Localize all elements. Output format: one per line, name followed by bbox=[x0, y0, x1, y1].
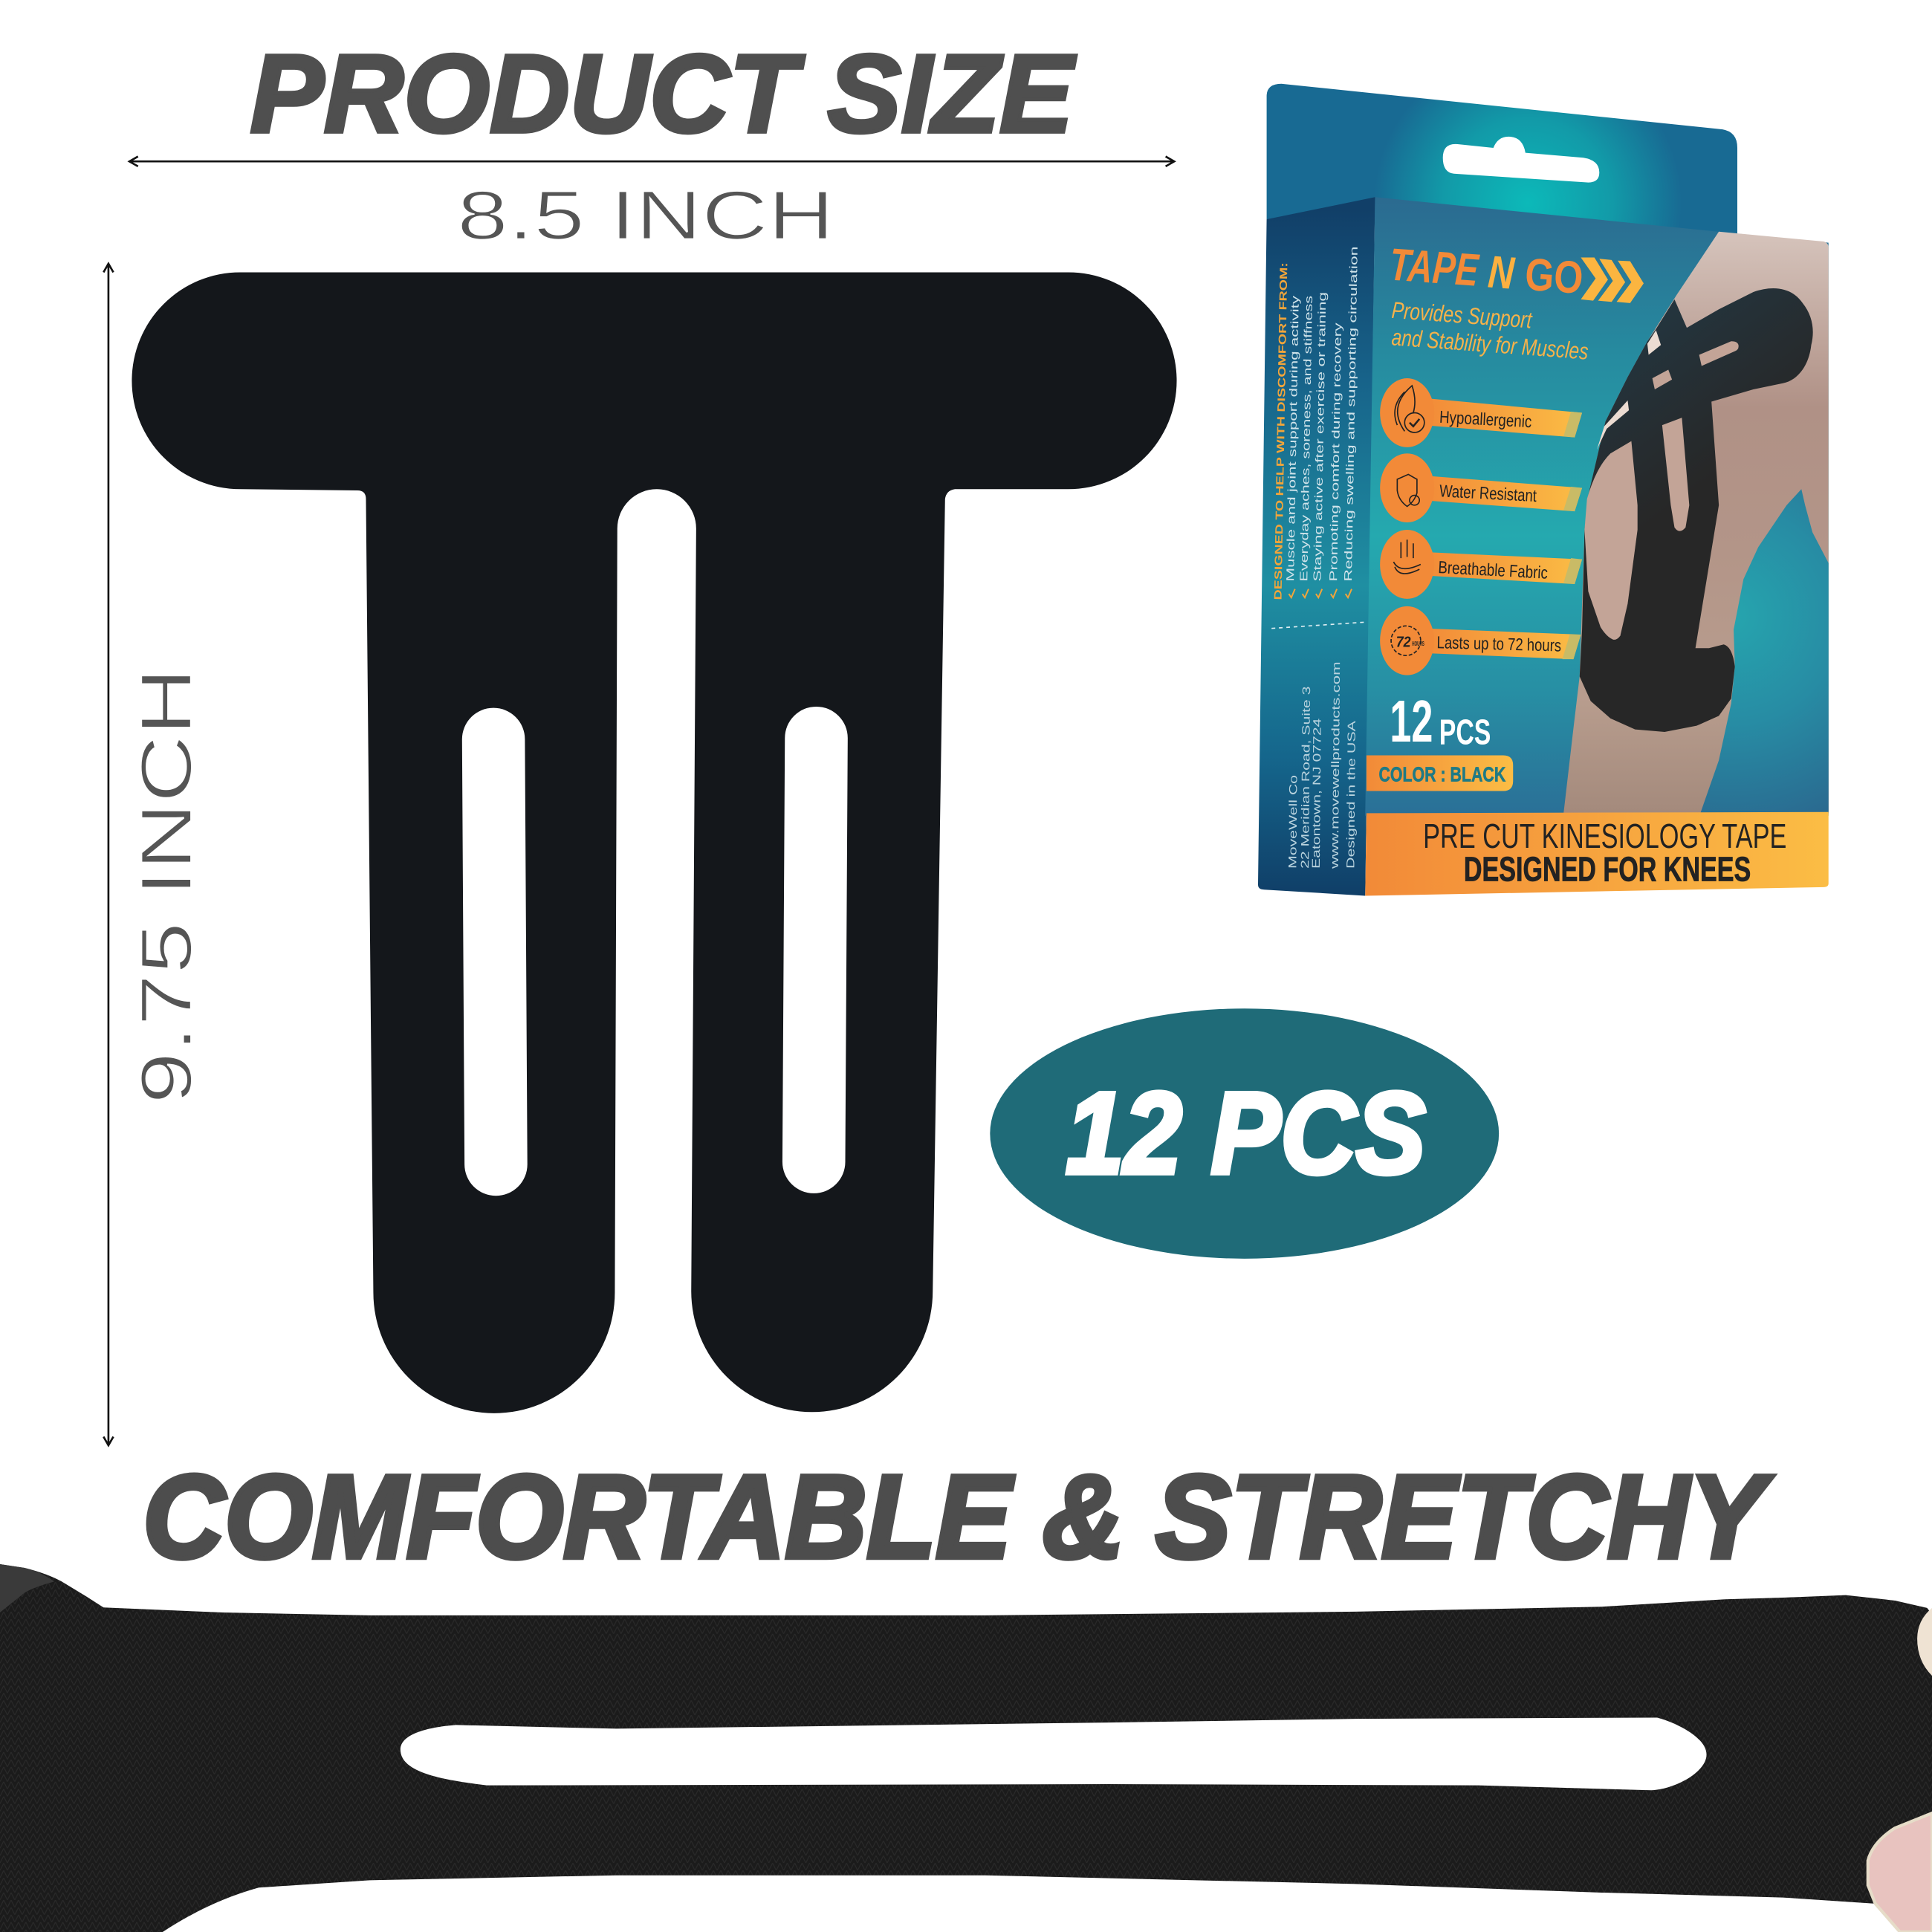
photo: stretched tape bbox=[0, 1564, 1932, 1932]
colour pill: COLOR : BLACK bbox=[1378, 762, 1506, 785]
badge: 12 pcs bbox=[990, 1008, 1499, 1259]
fingertip top bbox=[1917, 1608, 1932, 1676]
label: 9.75 inch height: 9.75 INCH bbox=[127, 668, 207, 1104]
title: product size: PRODUCT SIZE bbox=[250, 31, 1077, 155]
feature: hypoallergenic: Hypoallergenic bbox=[1439, 407, 1532, 431]
box piece count: PCS bbox=[1439, 713, 1491, 753]
feature: lasts up to 72 hours: Lasts up to 72 hours bbox=[1436, 632, 1561, 655]
box piece count: 12 bbox=[1390, 688, 1433, 754]
product box bbox=[1258, 84, 1829, 895]
photo: taped knee bbox=[1563, 232, 1829, 813]
side panel benefits text: Reducing swelling and supporting circulation bbox=[1343, 246, 1361, 582]
box side panel bbox=[1258, 197, 1375, 895]
colour pill bbox=[1367, 755, 1513, 791]
feature: breathable fabric: Breathable Fabric bbox=[1438, 557, 1549, 583]
side panel address text: www.movewellproducts.com bbox=[1329, 661, 1343, 870]
side panel benefits text: Promoting comfort during recovery bbox=[1328, 322, 1344, 582]
side panel address text: 22 Meridian Road, Suite 3 bbox=[1299, 686, 1313, 869]
pre-cut black kinesiology tape shape bbox=[132, 272, 1177, 1413]
tape fold corner bbox=[0, 1564, 54, 1612]
side panel address text: Eatontown, NJ 07724 bbox=[1310, 719, 1324, 869]
side panel address text: Designed in the USA bbox=[1344, 721, 1358, 869]
feature: water resistant: Water Resistant bbox=[1439, 481, 1537, 505]
label: 8.5 inch width: 8.5 INCH bbox=[457, 177, 834, 254]
side panel address text bbox=[1286, 661, 1358, 870]
feature: water resistant bbox=[1380, 453, 1582, 522]
arrow: height dimension bbox=[103, 264, 114, 1445]
side panel benefits text bbox=[1272, 246, 1361, 600]
feature: lasts up to 72 hours: 72 bbox=[1396, 635, 1411, 651]
tape on knee bbox=[1580, 288, 1813, 732]
box front panel bbox=[1365, 197, 1829, 816]
feature: breathable fabric bbox=[1380, 530, 1582, 599]
feature: lasts up to 72 hours bbox=[1380, 606, 1581, 675]
brand name: GO bbox=[1523, 249, 1585, 304]
tagline: and Stability for Muscles bbox=[1391, 323, 1589, 365]
brand name bbox=[1388, 239, 1644, 304]
box bottom banner: PRE CUT KINESIOLOGY TAPE bbox=[1423, 817, 1786, 855]
brand name: N bbox=[1486, 246, 1517, 299]
arrow: width dimension bbox=[129, 157, 1174, 166]
fingertip bottom bbox=[1868, 1813, 1932, 1932]
box bottom banner bbox=[1365, 812, 1829, 895]
box hang tab bbox=[1267, 84, 1737, 240]
heading: comfortable and stretchy: COMFORTABLE & STRETCHY bbox=[143, 1450, 1774, 1583]
side panel benefits text: Muscle and joint support during activity bbox=[1285, 295, 1302, 582]
brand name: TAPE bbox=[1388, 239, 1481, 296]
tagline: Provides Support bbox=[1391, 296, 1534, 334]
side panel benefits text: DESIGNED TO HELP WITH DISCOMFORT FROM: bbox=[1272, 262, 1290, 600]
side panel benefits text: Staying active after exercise or training bbox=[1312, 292, 1329, 582]
side panel check marks bbox=[1288, 589, 1352, 597]
brand chevrons bbox=[1581, 258, 1644, 303]
feature: hypoallergenic bbox=[1380, 378, 1582, 447]
box bottom banner: DESIGNED FOR KNEES bbox=[1464, 850, 1751, 889]
side panel benefits text: Everyday aches, soreness, and stiffness bbox=[1298, 296, 1315, 582]
tape knee gaps bbox=[1584, 330, 1739, 640]
side panel address text: MoveWell Co bbox=[1286, 775, 1300, 869]
feature: lasts up to 72 hours: HOURS bbox=[1412, 640, 1424, 647]
badge: 12 pcs: 12 PCS bbox=[1066, 1069, 1425, 1199]
tagline bbox=[1391, 296, 1589, 365]
box piece count bbox=[1390, 688, 1491, 754]
